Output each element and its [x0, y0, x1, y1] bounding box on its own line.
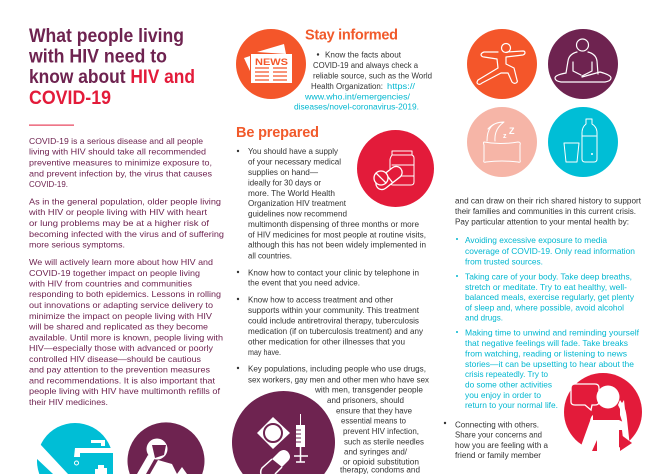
text block: learning more: [28, 257, 223, 407]
bullet: supply: more. The World Health: [248, 189, 335, 198]
text block: intro: COVID-19 is a serious disease and all people: [29, 136, 203, 146]
bullet: time to unwind: that negative feelings will fade. Take breaks: [465, 338, 628, 348]
title: with HIV need to: [28, 46, 167, 68]
bullet: media exposure: Avoiding excessive exposure to media: [465, 235, 607, 245]
text block: intro: preventive measures to minimize exposure to,: [29, 158, 212, 168]
text block: shared history: [444, 196, 642, 424]
text block: older people: becoming infected with the virus and of suffering: [29, 229, 224, 239]
bullet: supply: Organization HIV treatment: [248, 199, 347, 208]
text block: learning more: responding to both epidemics. Lessons in rolling: [29, 289, 221, 299]
bullet: supply: You should have a supply: [248, 147, 338, 156]
text block: shared history: Pay particular attention to your mental health by:: [455, 218, 629, 226]
bullet: supply: of your necessary medical: [248, 158, 341, 166]
icon: sleep: z: [503, 133, 507, 140]
icon: sleep: Z: [509, 126, 515, 136]
text block: learning more: their HIV medicines.: [29, 397, 108, 407]
icon: condom, syringe and pill: [232, 391, 335, 474]
bullet: key populations: essential means to: [341, 416, 407, 426]
bullet: media exposure: coverage of COVID-19. Only read information: [465, 246, 635, 256]
icon: person with speech bubble: [564, 373, 642, 452]
icon: yoga pose: [467, 29, 537, 99]
text block: stay informed: Know the facts about: [325, 50, 402, 60]
icon: hand washing: [36, 423, 113, 474]
bullet: contact clinic: the event that you need advice.: [248, 278, 360, 288]
title: What people living: [29, 26, 184, 47]
text block: connecting with others: Share your concerns and: [455, 430, 542, 440]
text block: learning more: controlled HIV disease—should be cautious: [29, 354, 201, 364]
bullet: key populations: prevent HIV infection,: [343, 427, 419, 436]
text block: learning more: people living with HIV have multimonth refills of: [29, 386, 221, 396]
bullet: time to unwind: from watching, reading or listening to news: [465, 348, 627, 358]
text block: intro: and prevent infection by, the virus that causes: [29, 168, 212, 178]
text block: older people: with HIV or people living with HIV with heart: [28, 207, 208, 217]
text block: older people: [28, 196, 224, 250]
text block: stay informed: reliable source, such as the World: [313, 72, 432, 80]
icon: person with mask: [127, 422, 204, 474]
text block: stay informed: COVID-19 and always check a: [313, 61, 419, 70]
list: mental health: [456, 235, 640, 410]
text block: connecting with others: Connecting with others.: [455, 420, 539, 430]
bullet: care of body: [456, 272, 635, 322]
bullet: supply: ideally for 30 days or: [248, 178, 321, 188]
icon: sleep: [467, 107, 537, 177]
bullet: key populations: Key populations, including people who use drugs,: [248, 364, 426, 374]
text block: intro: living with HIV should take all recommended: [29, 146, 206, 156]
text block: stay informed: diseases/novel-coronavirus-2019.: [294, 102, 419, 112]
text block: shared history: and can draw on their rich shared history to support: [455, 196, 642, 206]
bullet: time to unwind: [456, 328, 640, 410]
bullet: contact clinic: [237, 268, 419, 288]
heading: be prepared: Be prepared: [236, 125, 319, 141]
bullet: access treatment: supports within your community. This treatment: [248, 306, 420, 315]
bullet: care of body: stretch or meditate. Try to eat healthy, well-: [465, 282, 627, 292]
text block: learning more: with HIV from countries and communities: [28, 278, 192, 288]
bullet: access treatment: medication (if on tuberculosis treatment) and any: [248, 327, 423, 336]
bullet: time to unwind: you enjoy in order to: [465, 390, 541, 400]
text block: learning more: out innovations or adapting service delivery to: [29, 300, 213, 310]
bullet: key populations: such as sterile needles: [344, 438, 424, 446]
bullet: supply: [237, 147, 426, 260]
text block: learning more: will be shared and replicated as they become: [28, 322, 208, 332]
bullet: access treatment: other medication for other illnesses that you: [248, 338, 405, 346]
bullet: key populations: or opioid substitution: [343, 458, 419, 466]
text block: older people: As in the general population, older people living: [29, 196, 221, 206]
icon: medicine jar and pills: [357, 130, 434, 207]
text block: intro: [29, 136, 212, 189]
bullet: key populations: [237, 364, 429, 474]
bullet: time to unwind: crisis repeatedly. Try to: [465, 369, 548, 379]
bullet: key populations: and prisoners, should: [327, 396, 404, 405]
text block: learning more: We will actively learn more about how HIV and: [29, 257, 213, 267]
title: [28, 26, 195, 109]
text block: learning more: available. Until more is known, people living with: [29, 332, 223, 342]
bullet: key populations: ensure that they have: [336, 406, 413, 416]
icon: newspaper: NEWS: [255, 57, 288, 67]
list: be prepared: [237, 147, 429, 474]
bullet: time to unwind: Making time to unwind and reminding yourself: [465, 328, 640, 338]
icon: meditation: [548, 29, 618, 99]
bullet: care of body: of sleep and, where possible, avoid alcohol: [465, 302, 624, 312]
bullet: supply: supplies on hand—: [248, 168, 318, 177]
text block: connecting with others: how you are feeling with a: [455, 441, 549, 450]
bullet: access treatment: may have.: [248, 348, 281, 357]
bullet: key populations: and syringes and/: [344, 448, 408, 456]
text block: shared history: their families and communities in this current crisis.: [455, 207, 636, 216]
text block: learning more: and recommendations. It is also important that: [29, 376, 216, 386]
text block: learning more: COVID-19 together impact on people living: [29, 268, 200, 278]
bullet: time to unwind: do some other activities: [465, 380, 552, 390]
text block: connecting with others: friend or family member: [455, 451, 541, 460]
bullet: supply: of HIV medicines for most people at routine visits,: [248, 230, 426, 240]
bullet: access treatment: [237, 296, 423, 357]
icon: newspaper: [236, 29, 306, 99]
bullet: access treatment: Know how to access treatment and other: [248, 296, 393, 304]
bullet: care of body: and drugs.: [465, 312, 503, 322]
bullet: supply: guidelines now recommend: [248, 210, 347, 218]
text block: learning more: HIV—especially those with advanced or poorly: [29, 343, 214, 353]
bullet: media exposure: from trusted sources.: [465, 256, 543, 266]
bullet: time to unwind: return to your normal life.: [465, 400, 558, 410]
text block: stay informed: https://: [387, 81, 416, 91]
heading: stay informed: Stay informed: [305, 28, 398, 44]
bullet: time to unwind: stories—it can be upsetting to hear about the: [465, 359, 634, 369]
bullet: supply: all countries.: [248, 252, 292, 260]
text block: stay informed: www.who.int/emergencies/: [304, 92, 411, 102]
bullet: care of body: Taking care of your body. Take deep breaths,: [465, 272, 632, 282]
text block: older people: or lung problems may be at a higher risk of: [29, 218, 210, 228]
bullet: key populations: with men, transgender people: [314, 386, 424, 394]
title: COVID-19: [29, 88, 111, 109]
text block: learning more: and pay attention to the prevention measures: [29, 364, 210, 374]
bullet: key populations: sex workers, gay men and other men who have sex: [248, 376, 429, 384]
bullet: supply: although this has not been widely implemented in: [248, 240, 426, 250]
bullet: supply: multimonth dispensing of three months or more: [248, 220, 420, 229]
title: know about HIV and: [29, 67, 195, 88]
bullet: media exposure: [456, 235, 635, 266]
bullet: care of body: balanced meals, exercise regularly, get plenty: [465, 292, 635, 302]
text block: intro: COVID-19.: [29, 179, 68, 189]
text block: stay informed: Health Organization:: [311, 82, 383, 91]
text block: learning more: minimize the impact on people living with HIV: [29, 311, 212, 321]
text block: older people: more serious symptoms.: [29, 240, 125, 250]
text block: connecting with others: [455, 420, 549, 460]
icon: water bottle and glass: [548, 107, 618, 177]
bullet: access treatment: could include antiretroviral therapy, tuberculosis: [248, 316, 419, 326]
bullet: contact clinic: Know how to contact your clinic by telephone in: [248, 268, 419, 278]
text block: stay informed: [294, 50, 432, 112]
